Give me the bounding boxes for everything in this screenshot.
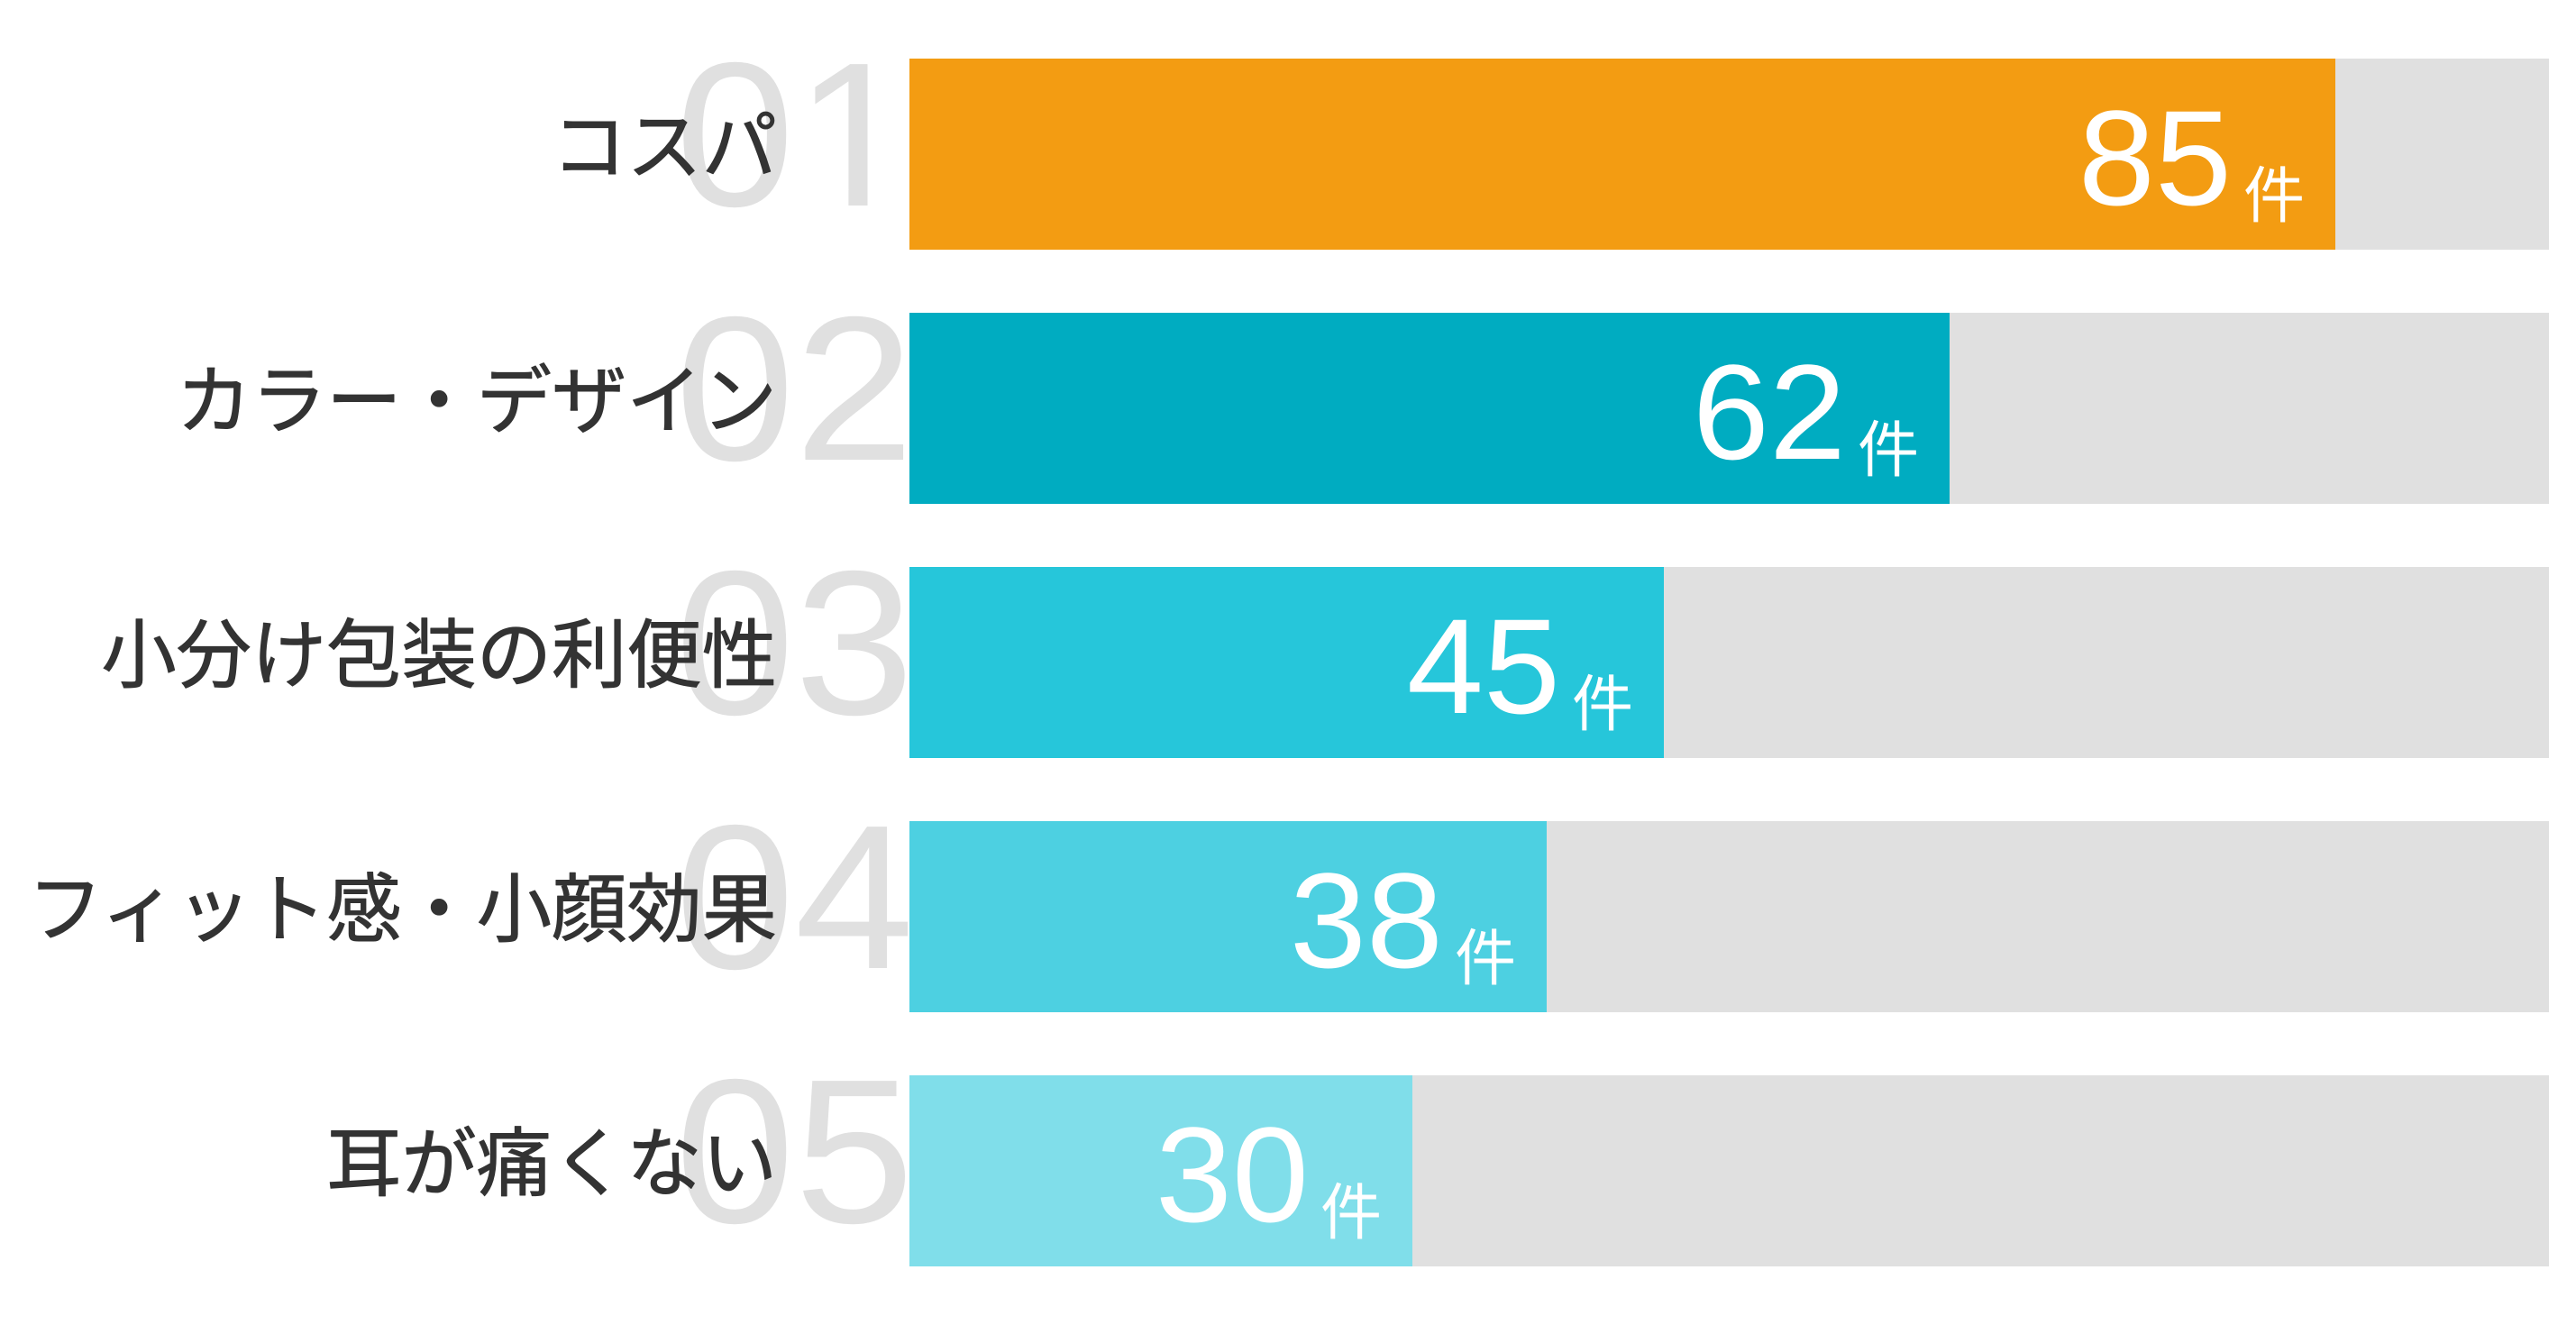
unit 件: 件 [1572,671,1633,739]
label: コスパ: コスパ [552,105,777,189]
label: カラー・デザイン: カラー・デザイン [177,360,777,443]
row 2: カラー・デザイン 62件 [177,275,2549,504]
value 45: 45 [1407,591,1560,743]
bar value 38 [909,821,1547,1012]
value 85: 85 [2078,83,2232,234]
rank number 04: 04 [675,783,914,1012]
label: 小分け包装の利便性: 小分け包装の利便性 [101,614,777,698]
unit 件: 件 [1455,925,1516,993]
row 1: コスパ 85件 [562,59,2549,250]
bar track 1 [909,59,2549,250]
row 5: 耳が痛くない 30件 [326,1037,2549,1266]
rank number 03: 03 [675,529,914,758]
row 4: フィット感・小顔効果 38件 [28,783,2549,1012]
rank number 01: 01 [675,21,914,250]
unit 件: 件 [2243,162,2305,231]
unit 件: 件 [1320,1179,1382,1247]
value 62: 62 [1693,337,1846,489]
unit 件: 件 [1858,416,1919,485]
bar value 62 [909,313,1950,504]
bar value 85 [909,59,2335,250]
value 38: 38 [1290,845,1443,997]
rank number 02: 02 [675,275,914,504]
label: 耳が痛くない: 耳が痛くない [326,1122,777,1206]
bar track 2 [909,313,2549,504]
bar track 5 [909,1075,2549,1266]
label: フィット感・小顔効果: フィット感・小顔効果 [28,868,777,952]
rank number 05: 05 [675,1037,914,1266]
bar track 3 [909,567,2549,758]
bar value 30 [909,1075,1412,1266]
value 30: 30 [1156,1100,1309,1251]
row 3: 小分け包装の利便性 45件 [101,529,2549,758]
bar value 45 [909,567,1664,758]
bar track 4 [909,821,2549,1012]
